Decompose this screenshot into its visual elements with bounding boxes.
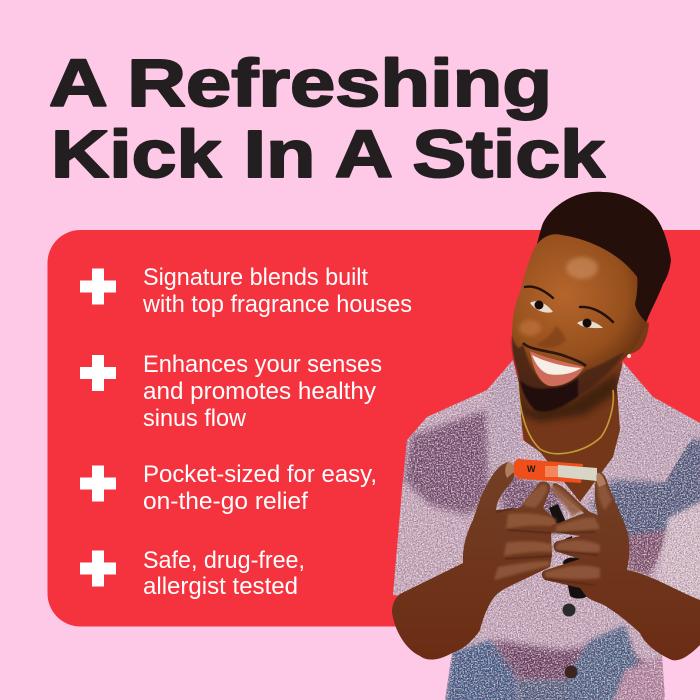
shirt: lower left blue patch [445, 640, 520, 700]
title: A Refreshing [49, 46, 552, 121]
title [49, 46, 606, 192]
benefit: enhances senses: and promotes healthy [143, 378, 376, 405]
benefit: safe and drug-free [80, 547, 305, 600]
moustache [523, 343, 586, 366]
benefit: signature blends: Signature blends built [143, 264, 368, 291]
benefit: safe and drug-free: allergist tested [143, 573, 298, 600]
benefits list [80, 264, 412, 600]
right thumb tip [596, 473, 606, 487]
ear [626, 322, 649, 354]
necklace [518, 381, 613, 454]
shirt button upper [562, 604, 576, 616]
stubble [512, 335, 625, 412]
shirt: lower right blue [560, 625, 640, 700]
shirt: dark woven speckle [385, 355, 700, 700]
benefit: safe and drug-free: Safe, drug-free, [143, 547, 305, 574]
shirt [385, 355, 700, 700]
shirt: bottom centre blue [515, 680, 570, 700]
benefit: pocket-sized: Pocket-sized for easy, [143, 461, 377, 488]
forehead highlight [566, 257, 598, 279]
shirt: right chest blue patch [590, 438, 700, 545]
right hand finger creases [545, 532, 598, 585]
neck [513, 362, 622, 505]
goatee [520, 378, 578, 412]
benefit: pocket-sized: on-the-go relief [143, 488, 308, 515]
lips [530, 351, 584, 386]
mouth and teeth [530, 351, 584, 386]
panel: red benefits card [47, 230, 700, 627]
photo: smiling man holding the stick [385, 192, 700, 700]
stick window [545, 466, 558, 477]
hair [537, 192, 671, 322]
right arm and hand [542, 472, 700, 660]
phone upper fragment [549, 504, 572, 547]
benefit: enhances senses: sinus flow [143, 405, 247, 432]
benefit: pocket-sized [80, 461, 377, 515]
left hand highlights [494, 484, 557, 580]
benefit: signature blends [80, 264, 412, 318]
stick white cap [558, 465, 597, 481]
shirt: lower right pink [612, 655, 668, 700]
shirt button lower [564, 666, 578, 678]
stick body [513, 459, 583, 483]
shirt: lower centre maroon band [492, 640, 650, 682]
benefit: signature blends: with top fragrance houses [142, 291, 412, 318]
eyebrows [525, 287, 613, 322]
shirt: left collar pale [490, 362, 525, 470]
phone behind fingers [563, 558, 591, 598]
shirt: upper chest maroon patch [495, 468, 560, 530]
benefit: enhances senses [80, 351, 382, 432]
teeth [532, 355, 581, 375]
title: Kick In A Stick [51, 117, 606, 192]
nose shadow [536, 325, 566, 348]
stick logo: W [527, 464, 536, 474]
eyes [530, 300, 603, 328]
neck shadow [516, 372, 618, 422]
left arm and hand [392, 462, 558, 660]
product: orange stick [513, 459, 597, 483]
shirt: right sleeve pale patch [655, 500, 700, 600]
right hand highlights [545, 476, 612, 579]
shirt: right collar pale [644, 390, 694, 482]
face [512, 233, 648, 412]
benefit: enhances senses: Enhances your senses [143, 351, 382, 378]
left hand finger creases [496, 508, 552, 559]
shirt: left sleeve dark patch [404, 410, 489, 515]
earring [627, 354, 631, 358]
cheek highlight [519, 320, 541, 336]
shirt: right side maroon band [627, 529, 666, 576]
left thumb tip [505, 462, 514, 478]
shirt: light woven speckle [385, 355, 700, 700]
